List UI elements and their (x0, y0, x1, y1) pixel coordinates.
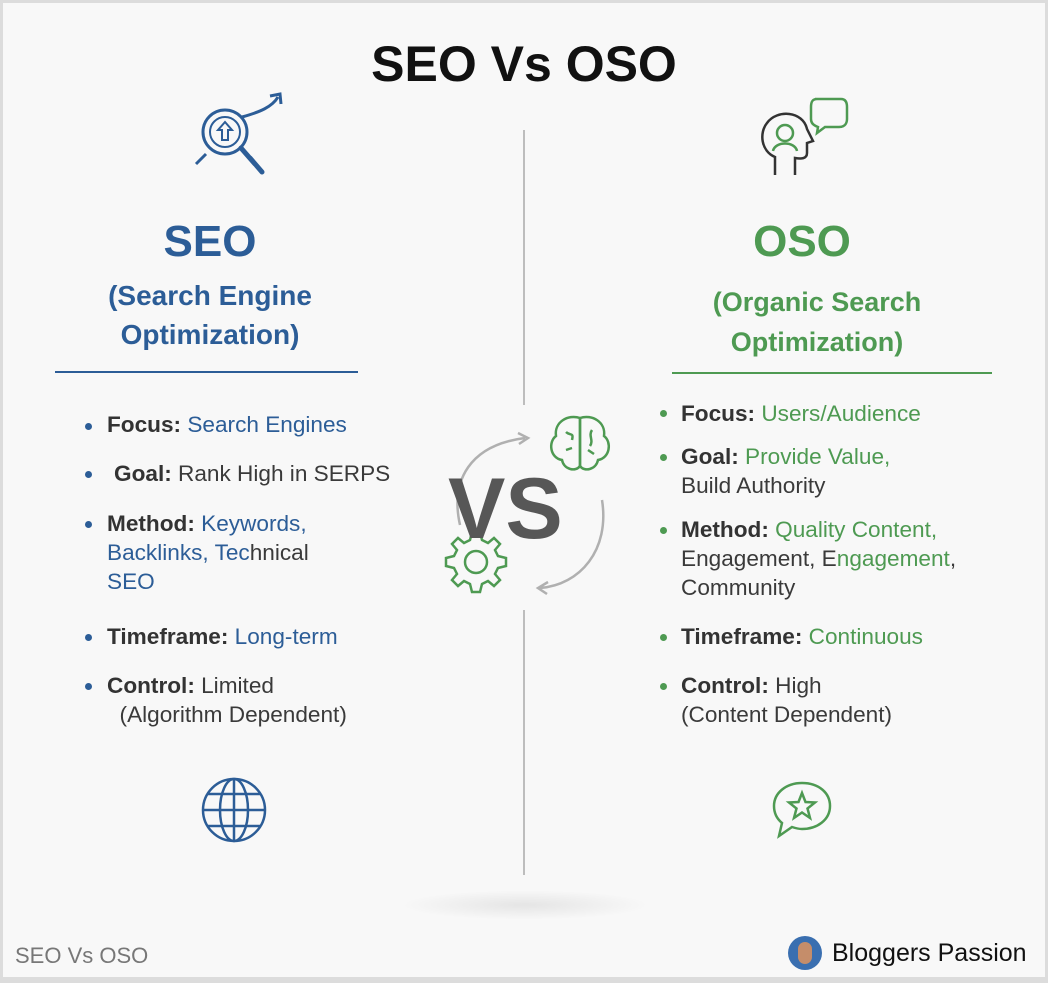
rule right (672, 372, 992, 374)
list: SEO (85, 412, 390, 727)
shadow under divider (400, 890, 650, 920)
subtitle: OSO (713, 287, 921, 357)
list: SEO: Timeframe: Long-term (107, 624, 338, 649)
list: SEO: Method: Keywords, (107, 511, 307, 536)
list: OSO: Timeframe: Continuous (681, 624, 923, 649)
list: OSO: Goal: Provide Value, (681, 444, 890, 469)
icon: head with speech bubble (761, 98, 848, 175)
heading: SEO: SEO (164, 217, 256, 266)
list: SEO: Goal: Rank High in SERPS (114, 461, 390, 486)
center VS graphic (444, 416, 610, 595)
subtitle: SEO: (Search Engine (108, 280, 312, 311)
list: OSO: Build Authority (681, 473, 825, 498)
heading: OSO: OSO (753, 217, 851, 266)
footer brand (788, 936, 1027, 970)
icon: magnifier with arrow (195, 92, 282, 174)
subtitle: OSO: (Organic Search (713, 287, 921, 317)
list: OSO: Control: High (681, 673, 822, 698)
list: OSO: Community (681, 575, 795, 600)
title: SEO Vs OSO (371, 36, 677, 92)
icon: chat star (772, 782, 832, 839)
list: OSO: Engagement, Engagement, (681, 546, 956, 571)
rule left (55, 371, 358, 373)
subtitle: SEO (108, 280, 312, 350)
list: OSO (660, 401, 956, 727)
text: VS: VS (448, 461, 563, 557)
footer brand: Bloggers Passion (832, 939, 1027, 967)
list: OSO: Method: Quality Content, (681, 517, 937, 542)
subtitle: SEO: Optimization) (121, 319, 299, 350)
footer label: SEO Vs OSO (15, 943, 148, 968)
list: SEO: Focus: Search Engines (107, 412, 347, 437)
list: SEO: (Algorithm Dependent) (120, 702, 347, 727)
subtitle: OSO: Optimization) (731, 327, 903, 357)
list: OSO: Focus: Users/Audience (681, 401, 921, 426)
list: SEO: Backlinks, Technical (107, 540, 309, 565)
list: SEO: SEO (107, 569, 155, 594)
divider (523, 130, 525, 405)
list: SEO: Control: Limited (107, 673, 274, 698)
icon: avatar (788, 936, 822, 970)
list: OSO: (Content Dependent) (681, 702, 892, 727)
icon: globe (202, 778, 266, 842)
